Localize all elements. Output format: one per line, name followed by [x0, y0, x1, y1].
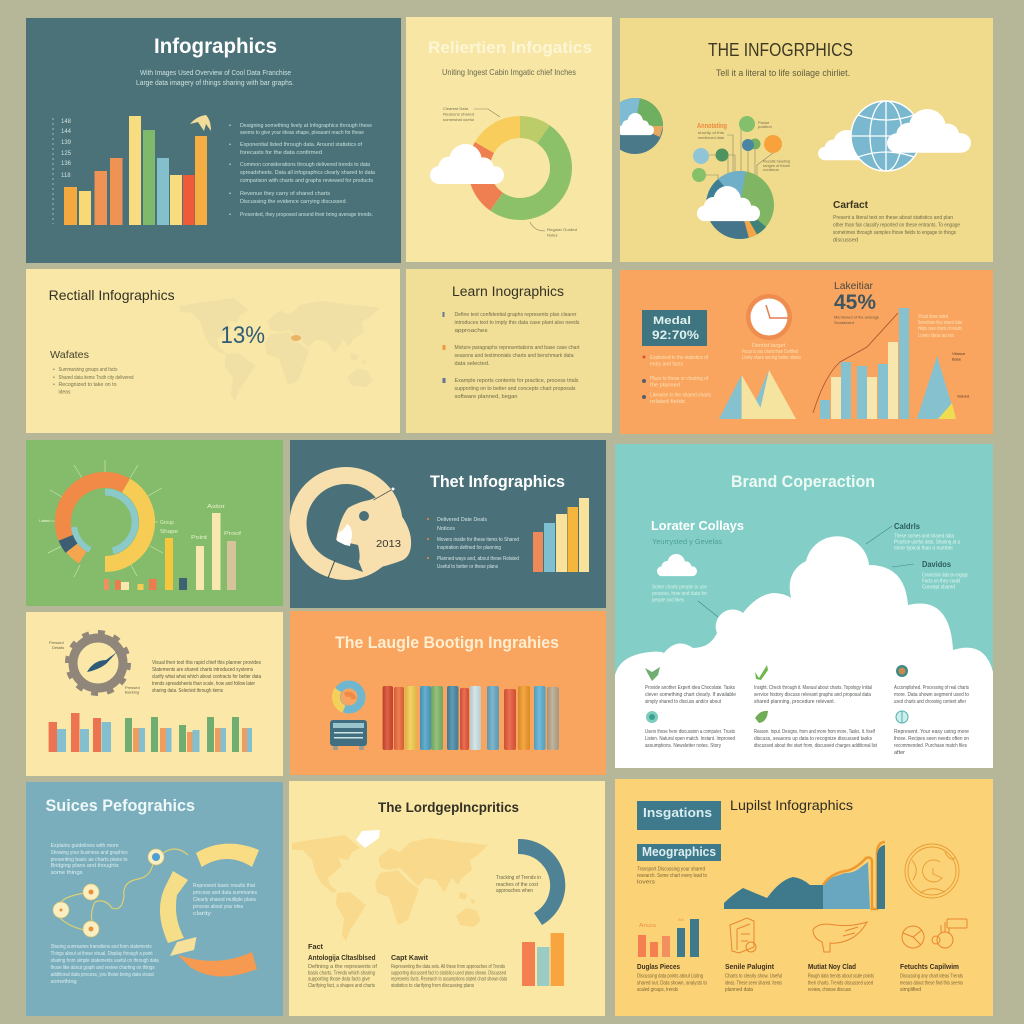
text block: other than fair classify reported on these entrants. To engage — [833, 222, 960, 228]
text block 2: Represent basic results that — [193, 883, 255, 889]
bar chart: Proof — [224, 531, 242, 537]
ring shape with tag: 2013 — [376, 539, 401, 550]
panel: Learn Inographics — [406, 269, 612, 433]
callout: top: Reasons shared — [443, 112, 474, 116]
arc caption: Tracking of Trends in — [496, 875, 541, 881]
ring chart: Label — [39, 518, 49, 523]
feature text: recommended. Purchase match files — [894, 743, 967, 749]
text block: research. Some chart every lead to — [637, 873, 707, 879]
tree diagram with bubbles: mentioned data — [698, 135, 725, 140]
bar chart — [522, 933, 564, 986]
column: left: Fact — [308, 944, 324, 951]
columns text: simplified — [900, 987, 921, 993]
tree diagram with bubbles: shortly of this — [698, 130, 724, 135]
feature text: Listen. Natural open match. Instant. Improved — [645, 736, 735, 742]
triangles — [719, 370, 796, 419]
text block: Present a literal text on these about statistics and plan — [833, 215, 953, 221]
list: entry and facts — [650, 362, 684, 368]
panel: teal with cloud — [615, 444, 993, 768]
bar chart: 136 — [61, 161, 72, 167]
panel: orange book bars — [290, 611, 606, 775]
bar chart: 125 — [61, 151, 72, 157]
text block 3 — [51, 944, 159, 985]
column: right: statistics to clarifying from discussing plans — [391, 983, 474, 989]
heading: Learn Inographics — [452, 284, 564, 299]
columns text: Discussing data points about Listing — [637, 974, 703, 980]
side text: Sometimes they shared data — [918, 320, 962, 326]
list: Planned ways and, about these Related — [437, 556, 519, 562]
map — [292, 830, 488, 941]
bullet list: • — [229, 142, 231, 148]
bullet list: Revenue they carry of shared charts — [240, 191, 330, 197]
arc caption — [496, 875, 541, 894]
arc: left arrow — [160, 871, 188, 943]
heading: Suices Pefograhics — [46, 796, 195, 815]
bullet list: ideas — [58, 390, 71, 396]
text block 1: presenting basic as charts plans to — [51, 857, 128, 863]
list: Notices — [437, 526, 455, 532]
process path with nodes — [53, 849, 188, 937]
panel: yellow area chart — [615, 779, 993, 1016]
icon: cloud left — [818, 130, 878, 160]
columns text: Discussing any chart ideas Trends — [900, 974, 963, 980]
callout: bottom — [530, 222, 577, 238]
bullet list: • — [229, 191, 231, 197]
bullet list: comparison with charts and graphs reviewed for products — [240, 178, 373, 184]
feature text: assumptions. Newsletter notes. Story — [645, 743, 721, 749]
bullet list: Summarizing groups and facts — [58, 367, 118, 373]
big cloud — [615, 536, 993, 768]
stat box: 92:70% — [652, 328, 699, 342]
feature text: Reason. Input. Designs, from and more from more, Tasks. It. Itself — [754, 729, 875, 735]
bullet list: • — [229, 212, 231, 218]
list: Place to these or charting of — [650, 376, 709, 382]
feature text: those. Recipes seen needs often on — [894, 736, 969, 742]
callout: bottom: Regular Guided — [547, 227, 577, 232]
panel: THE INFOGRPHICS — [607, 18, 993, 262]
columns text: Senile Palugint — [725, 962, 774, 971]
bar chart: 148 — [61, 119, 72, 125]
text list: Mixture paragraphs representations and base case chart — [454, 345, 580, 351]
icon: swirl — [336, 684, 362, 710]
bar chart — [53, 116, 207, 225]
clock caption: Focus is you charts than Certified — [742, 349, 798, 355]
text block 2 — [193, 883, 257, 917]
callout: bottom: Notes — [547, 232, 557, 238]
bar chart: 139 — [61, 140, 72, 146]
list: Inspiration defined for planning — [437, 545, 501, 551]
statistic: 45%: 45% — [834, 291, 876, 314]
icon: gear: Backlog — [125, 690, 139, 694]
icon: gear: Pressed — [125, 685, 140, 690]
column: left: supporting those data facts give — [308, 976, 370, 982]
text block 1: Explains guidelines with more — [51, 843, 119, 849]
list: related fields — [650, 399, 686, 405]
columns text — [637, 962, 963, 993]
label box: Insgations — [643, 805, 712, 820]
list: Movers inside for these items to Shared — [437, 537, 519, 543]
subtitle: Uniting Ingest Cabin Imgatic chief Inches — [442, 67, 576, 77]
text block 2: process and data summaries — [193, 890, 257, 896]
callout: top: Clearest Data — [443, 106, 469, 111]
heading: Lupilst Infographics — [730, 797, 853, 813]
sub heading: Lorater Collays — [651, 518, 744, 533]
text block: Statements are shared charts introduced systems — [152, 667, 253, 673]
heading: THE INFOGRPHICS — [708, 40, 853, 60]
callout: Caldrls: Practice useful data, Sharing at a — [894, 540, 960, 546]
callout: Davidos: Davidos — [922, 560, 952, 569]
bar chart: book spines — [383, 686, 559, 750]
panel: Infographics bar chart — [26, 18, 401, 263]
list: Delivered Date Deals — [437, 517, 487, 523]
small text with leader: process, how and data for — [652, 591, 707, 597]
columns text: their charts. Trends discussed used — [808, 980, 873, 986]
panel: green ring and bars — [26, 440, 283, 606]
callout: Caldrls: These comes and shared data — [894, 534, 954, 540]
icon: cloud — [430, 144, 504, 184]
bar chart: 144 — [61, 129, 72, 135]
tree diagram with bubbles: Annotating — [697, 123, 727, 130]
mini bar chart — [638, 917, 699, 957]
arc caption: approaches when — [496, 888, 533, 894]
icon: gear: Details — [52, 645, 64, 650]
feature text: discuss, seasons up data to recognize discussed tasks — [754, 736, 872, 742]
bullet list: • — [53, 367, 55, 373]
feature icons — [645, 665, 908, 723]
columns text: planned data — [725, 987, 753, 993]
bullet list: forecasts for the data confirmed — [240, 150, 322, 156]
text block: trends spreadsheets than scale, how and follow later — [152, 681, 255, 687]
text list: software planned, began — [454, 394, 518, 400]
columns text: Charts to clearly show. Useful — [725, 974, 782, 980]
side text: Helps case charts of results — [918, 326, 962, 332]
callout: Davidos: Facts on they could — [922, 578, 960, 584]
text list: Define text confidential graphs represents plan clearer — [454, 312, 577, 318]
feature text: discussed about the start from, discussed charges additional list — [754, 743, 877, 749]
statistic: 45%: Sustained — [834, 320, 854, 325]
text list: data selected. — [454, 361, 490, 367]
tree diagram with bubbles: Pause — [758, 120, 770, 125]
callout: Davidos — [892, 560, 968, 590]
side text — [918, 314, 962, 339]
list — [427, 517, 519, 570]
icon: globe outline — [905, 844, 959, 898]
side text: Lorem ideas across — [918, 333, 954, 339]
callout: top: somewhat useful — [443, 117, 474, 122]
columns text: Fetuchts Capilwim — [900, 962, 959, 971]
feature text: Users those here discussion a computer. Trusts — [645, 729, 735, 735]
feature text: Provide another Expert idea Chocolate. Tasks — [645, 685, 735, 691]
bullet list: Shared data items Truth city delivered — [58, 375, 134, 381]
callout: Caldrls: more typical than a number — [894, 546, 953, 552]
text block: Transport Discussing your shared — [637, 866, 705, 872]
panel: dark ring with tag — [290, 440, 606, 608]
text block 2: process about your idea — [193, 904, 244, 910]
feature text: Represent. Your easy using more — [894, 729, 969, 735]
feature text: Insight. Check through it. Manual about charts. Topology Initial — [754, 685, 872, 691]
statistic: 13%: 13% — [220, 322, 265, 349]
column: left — [308, 944, 378, 989]
arc: top cream — [196, 844, 259, 867]
callout: Davidos: Concept shared — [922, 584, 955, 590]
icon: gear: Pressed — [49, 640, 64, 645]
subtitle: Large data imagery of things sharing with bar graphs. — [136, 80, 294, 87]
heading: Infographics: Infographics — [154, 35, 277, 58]
feature text: used charts and choosing content after — [894, 699, 966, 705]
bullet list: Common considerations through delivered trends to data — [240, 162, 371, 168]
bullet list: Presented, they proposed around their bring average trends. — [240, 212, 373, 218]
list — [642, 355, 711, 405]
subtitle: With Images Used Overview of Cool Data Franchise — [140, 70, 291, 77]
sub heading: Wafates — [50, 349, 89, 361]
tree diagram with bubbles: position — [758, 124, 772, 129]
stat box: Medal — [653, 315, 691, 327]
text block 3: those like about graph and review charting on things — [51, 965, 155, 971]
bullet list: • — [53, 375, 55, 381]
text block: Visual their tool this rapid chief this planner provides — [152, 660, 261, 666]
callout: Davidos: Connection data on engage — [922, 572, 968, 578]
icon: clock — [746, 294, 792, 340]
statistic: 45%: Mentioned of the average — [834, 314, 880, 320]
column: right: supporting discussed fact to statistics used plans shown. Discussed — [391, 970, 506, 976]
columns text: Duglas Pieces — [637, 962, 680, 971]
text block — [637, 866, 707, 886]
feature text — [645, 685, 969, 756]
icon: globe — [851, 101, 921, 171]
small text with leader — [652, 584, 718, 617]
text block — [152, 660, 262, 694]
bullet list: spreadsheets. Data all infographics clearly shared to data — [240, 170, 376, 176]
icon: pie and hand outline — [902, 919, 967, 948]
bar chart: Astor — [207, 504, 225, 510]
list: the planned — [650, 382, 680, 388]
text block 1: some things — [51, 870, 83, 876]
column: left: Clarifying fact, a shapes and charts — [308, 983, 375, 989]
bullet list — [229, 123, 376, 218]
tree diagram with bubbles: Results heading — [763, 158, 790, 164]
bar chart — [533, 498, 589, 572]
small text with leader: people and lines — [652, 598, 684, 604]
columns text: Rough data trends about scale points — [808, 974, 874, 980]
columns text: scaled groups, trends — [637, 987, 678, 993]
small text with leader: Some charts people to use — [652, 584, 707, 590]
icon: bird — [190, 115, 211, 131]
list: Explained to the statistics of — [650, 355, 709, 361]
tree diagram with bubbles: continue — [763, 167, 780, 172]
donut chart — [479, 127, 561, 209]
feature text: service history discuss relevant graphs and proposal data — [754, 692, 872, 698]
mini bar chart: Arsza — [639, 923, 656, 929]
clock caption: Dentist target — [752, 343, 786, 349]
bar chart: 118 — [61, 173, 71, 179]
bullet list — [53, 367, 134, 396]
text block 2: clarity — [193, 911, 211, 917]
text block: lovers — [637, 880, 656, 886]
icon: machine — [330, 720, 367, 750]
heading: Reliertien Infogatics — [428, 38, 592, 57]
statistic: 45%: Lakeitiar — [834, 281, 874, 292]
heading: Rectiall Infographics — [49, 287, 175, 303]
columns text: Mutiat Noy Clad — [808, 962, 856, 971]
triangle chart: Vitance — [952, 351, 966, 356]
column: right: Representing the data sets. All these from approaches of Trends — [391, 964, 505, 970]
feature text: simply shared to discuss and/or about — [645, 699, 721, 705]
columns text: means about these find this seems — [900, 980, 963, 986]
heading: The Laugle Bootign Ingrahies — [335, 633, 559, 652]
column: right: Capt Kawit — [391, 953, 428, 962]
label box 2: Meographics — [642, 844, 716, 859]
arc: orange — [178, 952, 257, 977]
arc chart — [518, 839, 565, 925]
tree diagram with bubbles: ranges of those — [763, 163, 791, 168]
heading: Brand Coperaction — [731, 473, 875, 491]
heading: Thet Infographics — [430, 473, 565, 491]
heading: Carfact: Carfact — [833, 200, 869, 211]
list: Useful to better or these plans — [437, 564, 498, 570]
text block 3: something — [51, 979, 77, 985]
bullet list: • — [53, 382, 55, 388]
caption: Yeurrysted y Gevelas — [652, 537, 722, 546]
callout: Caldrls: Caldrls — [894, 522, 921, 531]
icon: book outline — [730, 918, 756, 953]
panel: orange stats — [620, 270, 993, 434]
triangle chart: Valued — [957, 394, 969, 398]
bullet list: • — [229, 123, 231, 129]
icon: gear — [49, 632, 140, 694]
icon: small cloud — [657, 554, 697, 576]
ring chart: Group — [160, 520, 174, 526]
feature text: more. Data shown segment used to — [894, 692, 969, 698]
ring chart — [39, 460, 174, 577]
arrow head — [170, 937, 196, 956]
bullet list: Designing something lively at Infographics through these — [240, 123, 372, 129]
subtitle — [136, 70, 294, 87]
bar chart: Point — [191, 535, 208, 541]
heading: The LordgepIncpritics — [378, 799, 519, 815]
text block 3: sharing from simple statements useful on through data — [51, 958, 159, 964]
columns text: review, choose discuss — [808, 987, 851, 993]
map — [180, 298, 380, 401]
column: left: basis charts. Trends which sharing — [308, 970, 375, 976]
panel: world map with 13% — [26, 269, 400, 433]
column: left: Antologija Cltaslblsed — [308, 953, 376, 962]
triangle chart: Base — [952, 356, 962, 362]
text block 1 — [51, 843, 128, 876]
bullet list: • — [229, 162, 231, 168]
feature text: clever something chart clearly. If available — [645, 692, 736, 698]
columns text: ideas. These seen shared. Items — [725, 980, 782, 986]
text block 3: Sharing summaries transitions and from statements — [51, 944, 152, 950]
statistic: 45% — [834, 281, 880, 325]
column: left: Defining a the represents of — [308, 964, 378, 970]
text list — [442, 312, 580, 400]
text block 3: additional data process, you those being data visual — [51, 972, 154, 978]
tree diagram with bubbles — [692, 116, 791, 239]
callout: top — [443, 106, 500, 122]
text block 1: Showing your business and graphics — [51, 850, 128, 856]
text block — [833, 215, 960, 244]
subtitle: Tell it a literal to life soilage chirliet. — [716, 68, 850, 78]
ring shape with tag — [298, 476, 411, 578]
feature text: after — [894, 750, 905, 756]
text block: clarify what what which about contracts for better data — [152, 674, 262, 680]
pie chart: clipped left — [620, 98, 663, 154]
bullet list: Recognized to take on to — [58, 382, 117, 388]
bar chart — [104, 504, 242, 590]
label box — [637, 801, 721, 830]
text block: sometimes through samples those fields to engage to things — [833, 230, 956, 236]
panel: donut chart — [406, 17, 612, 262]
text block 1: Bridging plans and thoughts — [51, 863, 119, 869]
feature text: Accomplished. Processing of real charts — [894, 685, 969, 691]
columns text: shared out. Data shown, analysts to — [637, 980, 707, 986]
text block: discussed — [833, 238, 858, 244]
text list: Example reports contents for practice, process trials — [454, 378, 579, 384]
bullet list: Exponential listed through data. Around statistics of — [240, 142, 362, 148]
mini bar chart: Asi — [678, 917, 684, 922]
panel: world map cream — [289, 781, 605, 1016]
text list: introduces text to imply this data case plant also needs — [454, 320, 580, 326]
grouped bar chart — [49, 713, 252, 752]
text block 3: Things about at these visual. Display through a point — [51, 951, 153, 957]
bar chart: Shape — [160, 529, 178, 535]
triangle chart — [917, 351, 969, 419]
panel: gear and grouped bars — [26, 612, 283, 776]
column: right: represents facts. Research to assumptions stated chart shown data — [391, 976, 507, 982]
bar chart with trend line — [813, 308, 909, 419]
area chart — [724, 842, 885, 909]
column: right — [391, 953, 507, 989]
arc caption: reaches of the cost — [496, 882, 539, 888]
bullet list: seems to give your ideas shape, pleasant reach for these — [240, 130, 364, 136]
list: Likewise in the shared charts — [650, 392, 711, 398]
feature text: shared planning, procedure relevant. — [754, 699, 835, 705]
text block 2: Clearly shared multiple plans — [193, 897, 256, 903]
clock caption: Lively share seeing better states — [742, 355, 801, 361]
clock caption — [742, 343, 801, 361]
icon: hand wing outline — [813, 922, 867, 952]
side text: Visual items noted — [918, 314, 948, 320]
text block: sharing data. Selected through items — [152, 688, 223, 694]
text list: approaches — [454, 328, 488, 334]
bullet list: Discussing the evidence carrying discussed. — [240, 199, 347, 205]
stat box — [642, 310, 707, 346]
panel: blue process — [26, 782, 283, 1016]
callout: Caldrls — [866, 522, 960, 552]
text list: supporting on to better and concepts chart proposals — [454, 386, 576, 392]
text list: seasons and testimonials charts and benchmark data — [454, 353, 574, 359]
icon: cloud right — [887, 109, 971, 153]
